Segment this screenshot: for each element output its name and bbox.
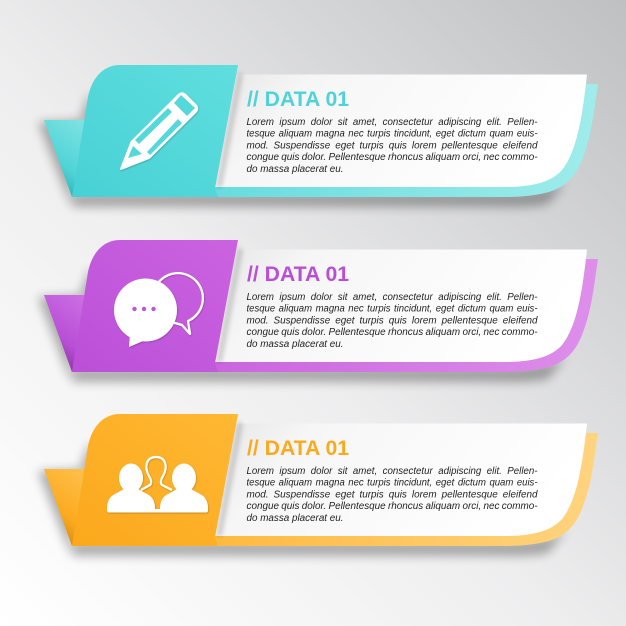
back band [72,259,598,372]
heading: // DATA 01 [247,88,349,111]
text block: mod. Suspendisse eget turpis quis lorem pellentesque eleifend [246,140,538,151]
icon: speech bubbles [114,273,203,347]
text block: congue quis dolor. Pellentesque rhoncus aliquam orci, nec commo- [246,152,538,163]
back flap [44,295,90,372]
panel: data 01 teal [38,65,598,207]
panel shadow [38,92,566,207]
tab edge shadow [216,72,243,187]
text block [246,292,538,350]
text block: mod. Suspendisse eget turpis quis lorem pellentesque eleifend [246,315,538,326]
heading: // DATA 01 [247,437,349,460]
panel: data 01 purple [38,240,598,382]
white card [215,424,587,536]
front tab [72,65,238,197]
front tab [72,414,238,546]
icon: people [107,457,208,512]
text block: Lorem ipsum dolor sit amet, consectetur adipiscing elit. Pellen- [246,466,538,477]
text block: Lorem ipsum dolor sit amet, consectetur adipiscing elit. Pellen- [246,117,538,128]
text block [246,117,538,175]
text block: tesque aliquam magna nec turpis tincidunt, eget dictum quam euis- [246,478,538,489]
text block: Lorem ipsum dolor sit amet, consectetur adipiscing elit. Pellen- [246,292,538,303]
text block: do massa placerat eu. [246,164,344,175]
back flap [44,469,90,546]
text block [246,466,538,524]
text block: tesque aliquam magna nec turpis tincidunt, eget dictum quam euis- [246,304,538,315]
text block: mod. Suspendisse eget turpis quis lorem pellentesque eleifend [246,489,538,500]
back band [72,433,598,546]
back band [72,84,598,197]
tab edge shadow [216,247,243,362]
heading: // DATA 01 [247,263,349,286]
white card [215,74,587,187]
text block: do massa placerat eu. [246,339,344,350]
panel: data 01 orange [38,414,598,556]
text block: congue quis dolor. Pellentesque rhoncus aliquam orci, nec commo- [246,501,538,512]
text block: do massa placerat eu. [246,513,344,524]
white card [215,250,587,362]
back flap [44,120,90,197]
panel shadow [38,267,566,382]
text block: tesque aliquam magna nec turpis tincidunt, eget dictum quam euis- [246,129,538,140]
front tab [72,240,238,372]
text block: congue quis dolor. Pellentesque rhoncus aliquam orci, nec commo- [246,327,538,338]
tab edge shadow [216,421,243,536]
panel shadow [38,441,566,556]
icon: pencil [121,93,197,169]
